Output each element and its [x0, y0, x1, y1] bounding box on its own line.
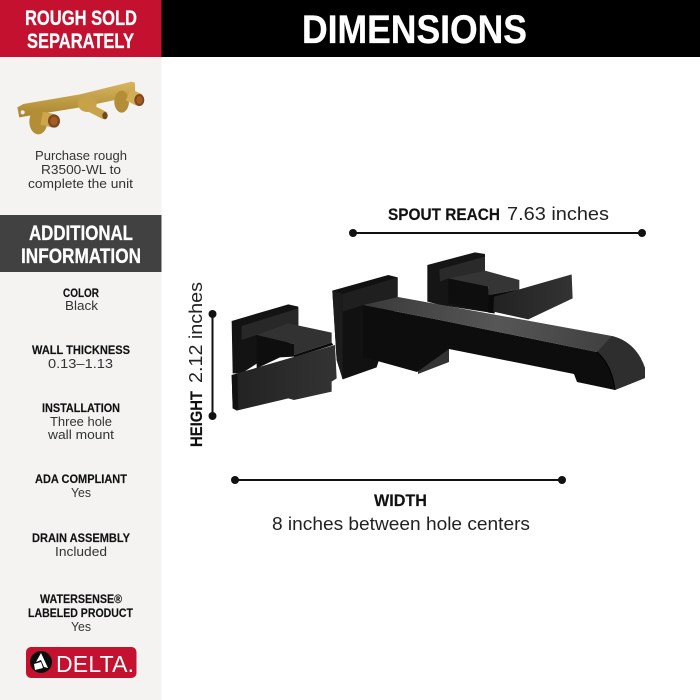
delta logo [26, 647, 136, 678]
spec: color: Black [65, 299, 99, 313]
spec: drain assembly: Included [55, 545, 107, 559]
height dimension: 2.12 inches [186, 282, 206, 383]
height dimension [186, 282, 216, 447]
spec: wall thickness: 0.13–1.13 [48, 357, 113, 371]
spec: drain assembly [32, 531, 130, 559]
rough sold separately banner [0, 0, 162, 57]
spec: watersense: LABELED PRODUCT [28, 606, 134, 620]
spec: wall thickness [32, 343, 130, 371]
rough purchase note: complete the unit [28, 176, 133, 191]
spout reach dimension [349, 204, 646, 237]
height dimension: HEIGHT [187, 390, 206, 447]
spec: watersense: WATERSENSE® [40, 592, 122, 606]
aerator stem [418, 346, 449, 374]
spec: color [63, 286, 99, 313]
rough sold separately banner: SEPARATELY [27, 30, 134, 53]
left handle [232, 304, 337, 411]
right handle [427, 252, 573, 319]
delta logo: DELTA. [56, 651, 134, 677]
spec: color: COLOR [63, 286, 99, 300]
spec: drain assembly: DRAIN ASSEMBLY [32, 531, 130, 545]
rough sold separately banner: ROUGH SOLD [25, 7, 137, 30]
center plate [332, 275, 398, 379]
rough purchase note: R3500-WL to [41, 162, 121, 177]
additional information banner: ADDITIONAL [29, 222, 133, 245]
spec: installation [42, 401, 120, 442]
title banner: DIMENSIONS [302, 8, 527, 52]
width dimension: 8 inches between hole centers [272, 514, 530, 534]
spec: watersense [28, 592, 134, 634]
width dimension: WIDTH [374, 491, 427, 510]
spout reach dimension: SPOUT REACH [388, 205, 500, 224]
spec: wall thickness: WALL THICKNESS [32, 343, 130, 357]
spout reach dimension: 7.63 inches [507, 204, 609, 224]
additional information banner [0, 215, 162, 272]
rough purchase note: Purchase rough [35, 148, 127, 163]
spec: installation: wall mount [47, 428, 115, 442]
spec: ada compliant: Yes [71, 486, 91, 500]
spec: installation: Three hole [50, 415, 112, 429]
rough purchase note [28, 148, 133, 191]
sidebar panel [0, 0, 162, 700]
spec: watersense: Yes [71, 620, 91, 634]
width dimension [231, 476, 566, 534]
icon: brass rough valve [17, 82, 144, 134]
faucet illustration [232, 252, 645, 411]
additional information banner: INFORMATION [21, 245, 141, 268]
title banner [162, 0, 700, 57]
spout [363, 297, 645, 390]
spec: installation: INSTALLATION [42, 401, 120, 415]
spec: ada compliant: ADA COMPLIANT [35, 472, 128, 486]
spec: ada compliant [35, 472, 128, 500]
